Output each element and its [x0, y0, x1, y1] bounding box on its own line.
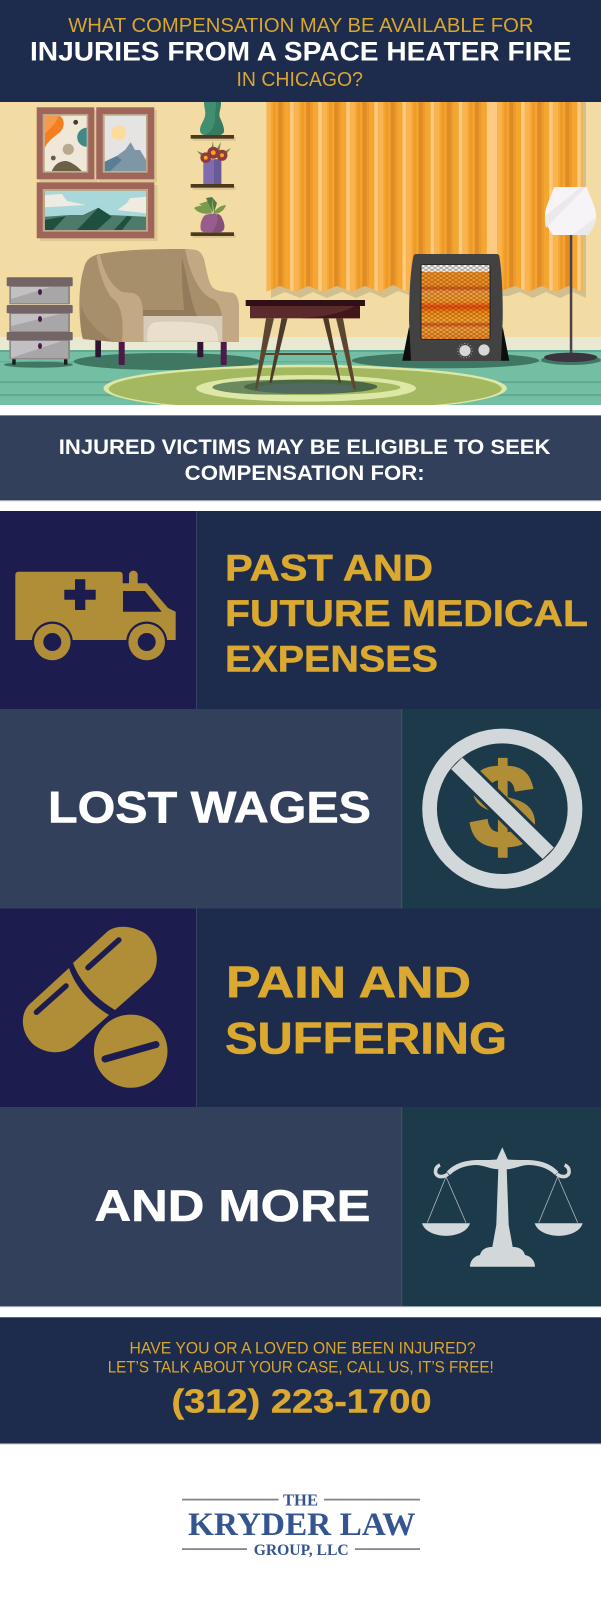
banner line 1: INJURED VICTIMS MAY BE ELIGIBLE TO SEEK: [59, 435, 551, 459]
icon: crossed-out dollar: [430, 736, 575, 881]
coffee table: [246, 300, 365, 389]
panel: pain and suffering: [0, 908, 601, 1107]
label: pain and suffering: [225, 958, 507, 1063]
baseboard: [0, 337, 601, 350]
label: and more: AND MORE: [94, 1182, 370, 1231]
logo word: the: THE: [283, 1491, 318, 1510]
panel: medical expenses: [0, 511, 601, 709]
illustration: living room with space heater: [0, 102, 601, 412]
icon: crossed-out dollar: $: [470, 741, 535, 873]
banner: eligible compensation: [0, 415, 601, 501]
panel: and more: [0, 1107, 601, 1307]
wall: [0, 102, 601, 337]
label: pain and suffering: SUFFERING: [225, 1014, 507, 1063]
label: past and future medical expenses: FUTURE MEDICAL: [225, 593, 588, 634]
shelves with plants: [191, 102, 236, 238]
label: pain and suffering: PAIN AND: [226, 958, 471, 1007]
label: past and future medical expenses: PAST AND: [225, 548, 433, 589]
heading line 3: IN CHICAGO?: [236, 69, 363, 91]
curtains: [266, 102, 586, 298]
phone number: (312) 223-1700: [172, 1383, 432, 1420]
dresser: [7, 277, 73, 365]
floor lamp: [544, 187, 597, 362]
space heater: [402, 254, 509, 361]
label: past and future medical expenses: [225, 548, 588, 680]
logo word: kryder law: KRYDER LAW: [188, 1507, 416, 1543]
rug: [104, 364, 507, 405]
icon: scales of justice: [422, 1147, 583, 1267]
icon: ambulance: [10, 571, 180, 665]
header panel: [0, 0, 601, 102]
picture frames: [37, 107, 158, 241]
icon: pills: [23, 927, 168, 1088]
panel: lost wages: [0, 709, 601, 908]
heading line 2: INJURIES FROM A SPACE HEATER FIRE: [30, 37, 572, 67]
logo word: group llc: GROUP, LLC: [254, 1542, 349, 1559]
call to action line 1: HAVE YOU OR A LOVED ONE BEEN INJURED?: [130, 1339, 476, 1357]
call to action panel: [0, 1317, 601, 1444]
armchair: [79, 249, 239, 365]
label: lost wages: LOST WAGES: [48, 784, 371, 833]
label: past and future medical expenses: EXPENSES: [225, 639, 438, 680]
floor shadows: [4, 353, 601, 370]
banner line 2: COMPENSATION FOR:: [185, 461, 425, 485]
floor: [0, 350, 601, 405]
call to action line 2: LET’S TALK ABOUT YOUR CASE, CALL US, IT’S FREE!: [108, 1358, 494, 1376]
heading line 1: WHAT COMPENSATION MAY BE AVAILABLE FOR: [68, 14, 533, 37]
logo: The Kryder Law Group, LLC: [182, 1491, 420, 1559]
